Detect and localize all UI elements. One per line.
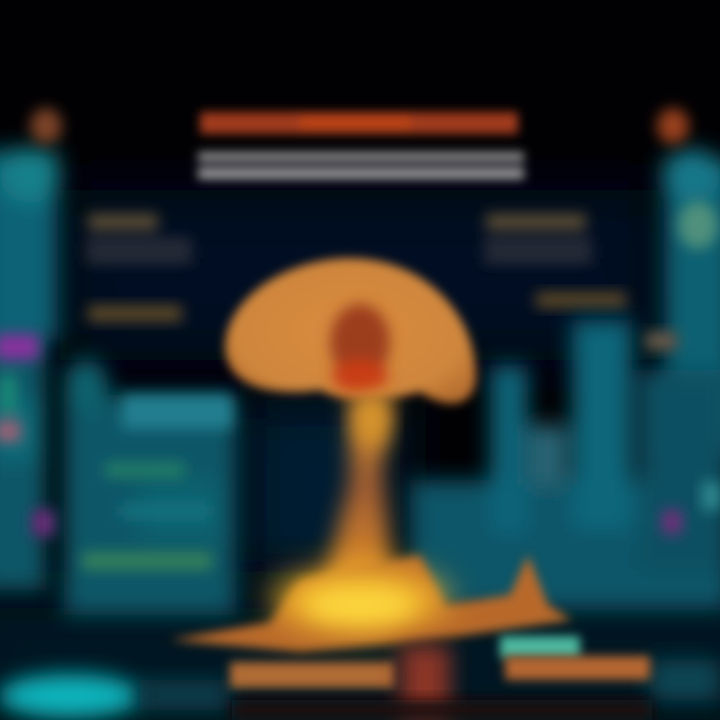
label: middle right bbox=[536, 292, 626, 308]
right panel: teal figure bbox=[645, 108, 720, 450]
bottom band bbox=[0, 636, 720, 720]
text block: upper right bbox=[484, 214, 592, 262]
panel: left teal block bbox=[64, 359, 236, 615]
icon: right figure head bbox=[657, 108, 689, 144]
cap core bbox=[330, 304, 390, 392]
chart: flame base bbox=[170, 555, 572, 652]
cap bbox=[225, 258, 476, 403]
text block: upper left bbox=[86, 214, 192, 262]
panel: right teal cityscape bbox=[410, 320, 720, 610]
left panel: teal figure bbox=[0, 108, 62, 590]
chart: central mushroom cloud bbox=[225, 258, 476, 600]
icon: left figure head bbox=[30, 108, 62, 144]
subtitle bbox=[198, 152, 524, 179]
stem glow bbox=[356, 396, 388, 448]
title bbox=[200, 112, 518, 134]
label: middle left bbox=[88, 305, 182, 322]
stem bbox=[320, 395, 395, 600]
